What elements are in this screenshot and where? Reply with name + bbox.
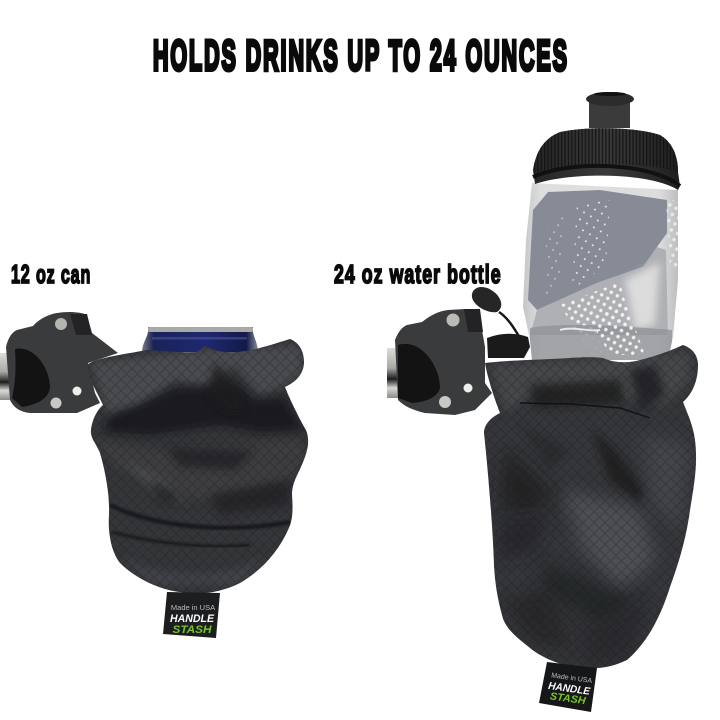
- tag right: Made in USA: [551, 672, 593, 685]
- label: 24 oz water bottle: 24 oz water bottle: [334, 260, 501, 289]
- cable with bell: [472, 287, 530, 358]
- photo: can in pouch on handlebar: [0, 312, 320, 638]
- fold shadows: [592, 430, 645, 505]
- pouch right: [480, 340, 705, 675]
- collar light: [90, 345, 302, 420]
- can: [142, 327, 258, 352]
- photo: bottle in pouch on handlebar: [387, 92, 705, 712]
- clamp right: [395, 309, 492, 415]
- tag left: [163, 592, 220, 638]
- pocket shadow: [105, 384, 303, 435]
- water bottle: [523, 92, 680, 360]
- tag left: HANDLE: [170, 613, 215, 625]
- collar: [490, 352, 690, 412]
- tag left: STASH: [172, 624, 213, 636]
- tag right: [539, 662, 597, 712]
- clamp left: [6, 312, 118, 413]
- pouch left: [88, 339, 308, 593]
- tag left: Made in USA: [171, 603, 215, 612]
- mid band: [96, 444, 307, 496]
- tag right: STASH: [549, 690, 587, 707]
- label: 12 oz can: 12 oz can: [11, 259, 90, 289]
- title: HOLDS DRINKS UP TO 24 OUNCES: [153, 32, 567, 80]
- handlebar left: [0, 353, 30, 400]
- tag right: HANDLE: [548, 680, 592, 698]
- light center: [565, 490, 655, 590]
- bottle cap: [530, 92, 680, 190]
- low folds: [110, 505, 290, 528]
- handlebar right: [387, 348, 417, 398]
